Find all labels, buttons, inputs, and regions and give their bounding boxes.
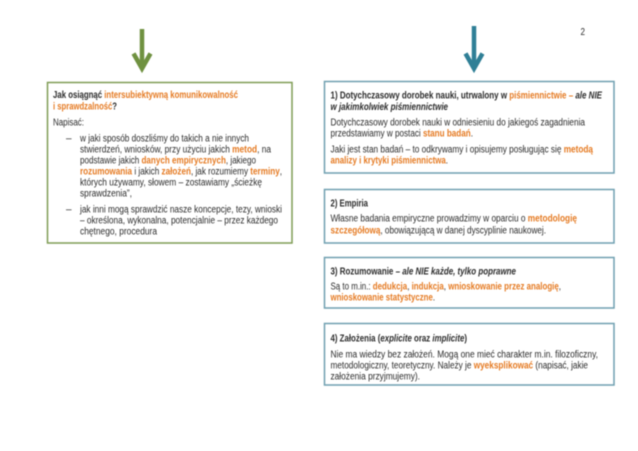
panel 2 body line 2: szczegółową, obowiązującą w danej dyscyplinie naukowej. (330, 226, 546, 236)
panel 3 body line 2: wnioskowanie statystyczne. (330, 292, 435, 304)
panel 4 heading: 4) Założenia (explicite oraz implicite) (330, 334, 467, 344)
label: napisać: Napisać: (53, 118, 84, 128)
page number: 2 (580, 27, 585, 38)
panel: 2 empirical research (324, 190, 614, 243)
panel: how to achieve intersubjective communicability (48, 82, 292, 243)
bullet dash two: – (66, 204, 72, 216)
bullet two line 3: chętnego, procedura (80, 226, 157, 238)
panel 4 body line 2: metodologiczny, teoretyczny. Należy je wyeksplikować (napisać, jakie (330, 360, 588, 372)
panel 1 body line 2: przedstawiamy w postaci stanu badań. (330, 128, 473, 140)
bullet two line 2: – określona, wykonalna, potencjalnie – przez każdego (80, 216, 278, 226)
panel 1 heading line 2: w jakimkolwiek piśmiennictwie (330, 102, 448, 113)
panel 2 heading: 2) Empiria (330, 198, 368, 210)
bullet one line 5: których używamy, słowem – zostawiamy „ścieżkę (80, 178, 262, 188)
bullet one line 4: rozumowania i jakich założeń, jak rozumiemy terminy, (80, 166, 282, 178)
bullet one line 3: podstawie jakich danych empirycznych, jakiego (80, 156, 256, 166)
panel 1 heading line 1: 1) Dotychczasowy dorobek nauki, utrwalony w piśmiennictwie – ale NIE (330, 90, 602, 102)
bullet dash one: – (66, 134, 72, 144)
panel: 3 reasoning (324, 258, 614, 308)
panel 1 body line 1: Dotychczasowy dorobek nauki w odniesieniu do jakiegoś zagadnienia (330, 118, 585, 128)
panel heading: Jak osiągnąć intersubiektywną komunikowalność (53, 90, 238, 101)
panel heading second line: i sprawdzalność? (53, 102, 117, 112)
panel 3 heading: 3) Rozumowanie – ale NIE każde, tylko poprawne (330, 266, 516, 278)
panel: 1 existing scholarship (324, 82, 614, 173)
panel 4 body line 3: założenia przyjmujemy). (330, 372, 420, 382)
bullet one line 2: stwierdzeń, wniosków, przy użyciu jakich metod, na (80, 144, 271, 156)
icon: green down arrow (134, 29, 150, 68)
panel 1 body line 4: analizy i krytyki piśmiennictwa. (330, 156, 448, 166)
panel 1 body line 3: Jaki jest stan badań – to odkrywamy i opisujemy posługując się metodą (330, 144, 593, 156)
bullet two line 1: jak inni mogą sprawdzić nasze koncepcje, tezy, wnioski (79, 204, 282, 216)
panel 2 body line 1: Własne badania empiryczne prowadzimy w oparciu o metodologię (330, 214, 577, 224)
panel 3 body line 1: Są to m.in.: dedukcja, indukcja, wnioskowanie przez analogię, (330, 282, 561, 292)
bullet one line 1: w jaki sposób doszliśmy do takich a nie innych (79, 134, 249, 144)
icon: blue down arrow (466, 26, 482, 68)
bullet one line 6: sprawdzenia”, (80, 188, 132, 200)
panel: 4 assumptions (324, 324, 614, 385)
